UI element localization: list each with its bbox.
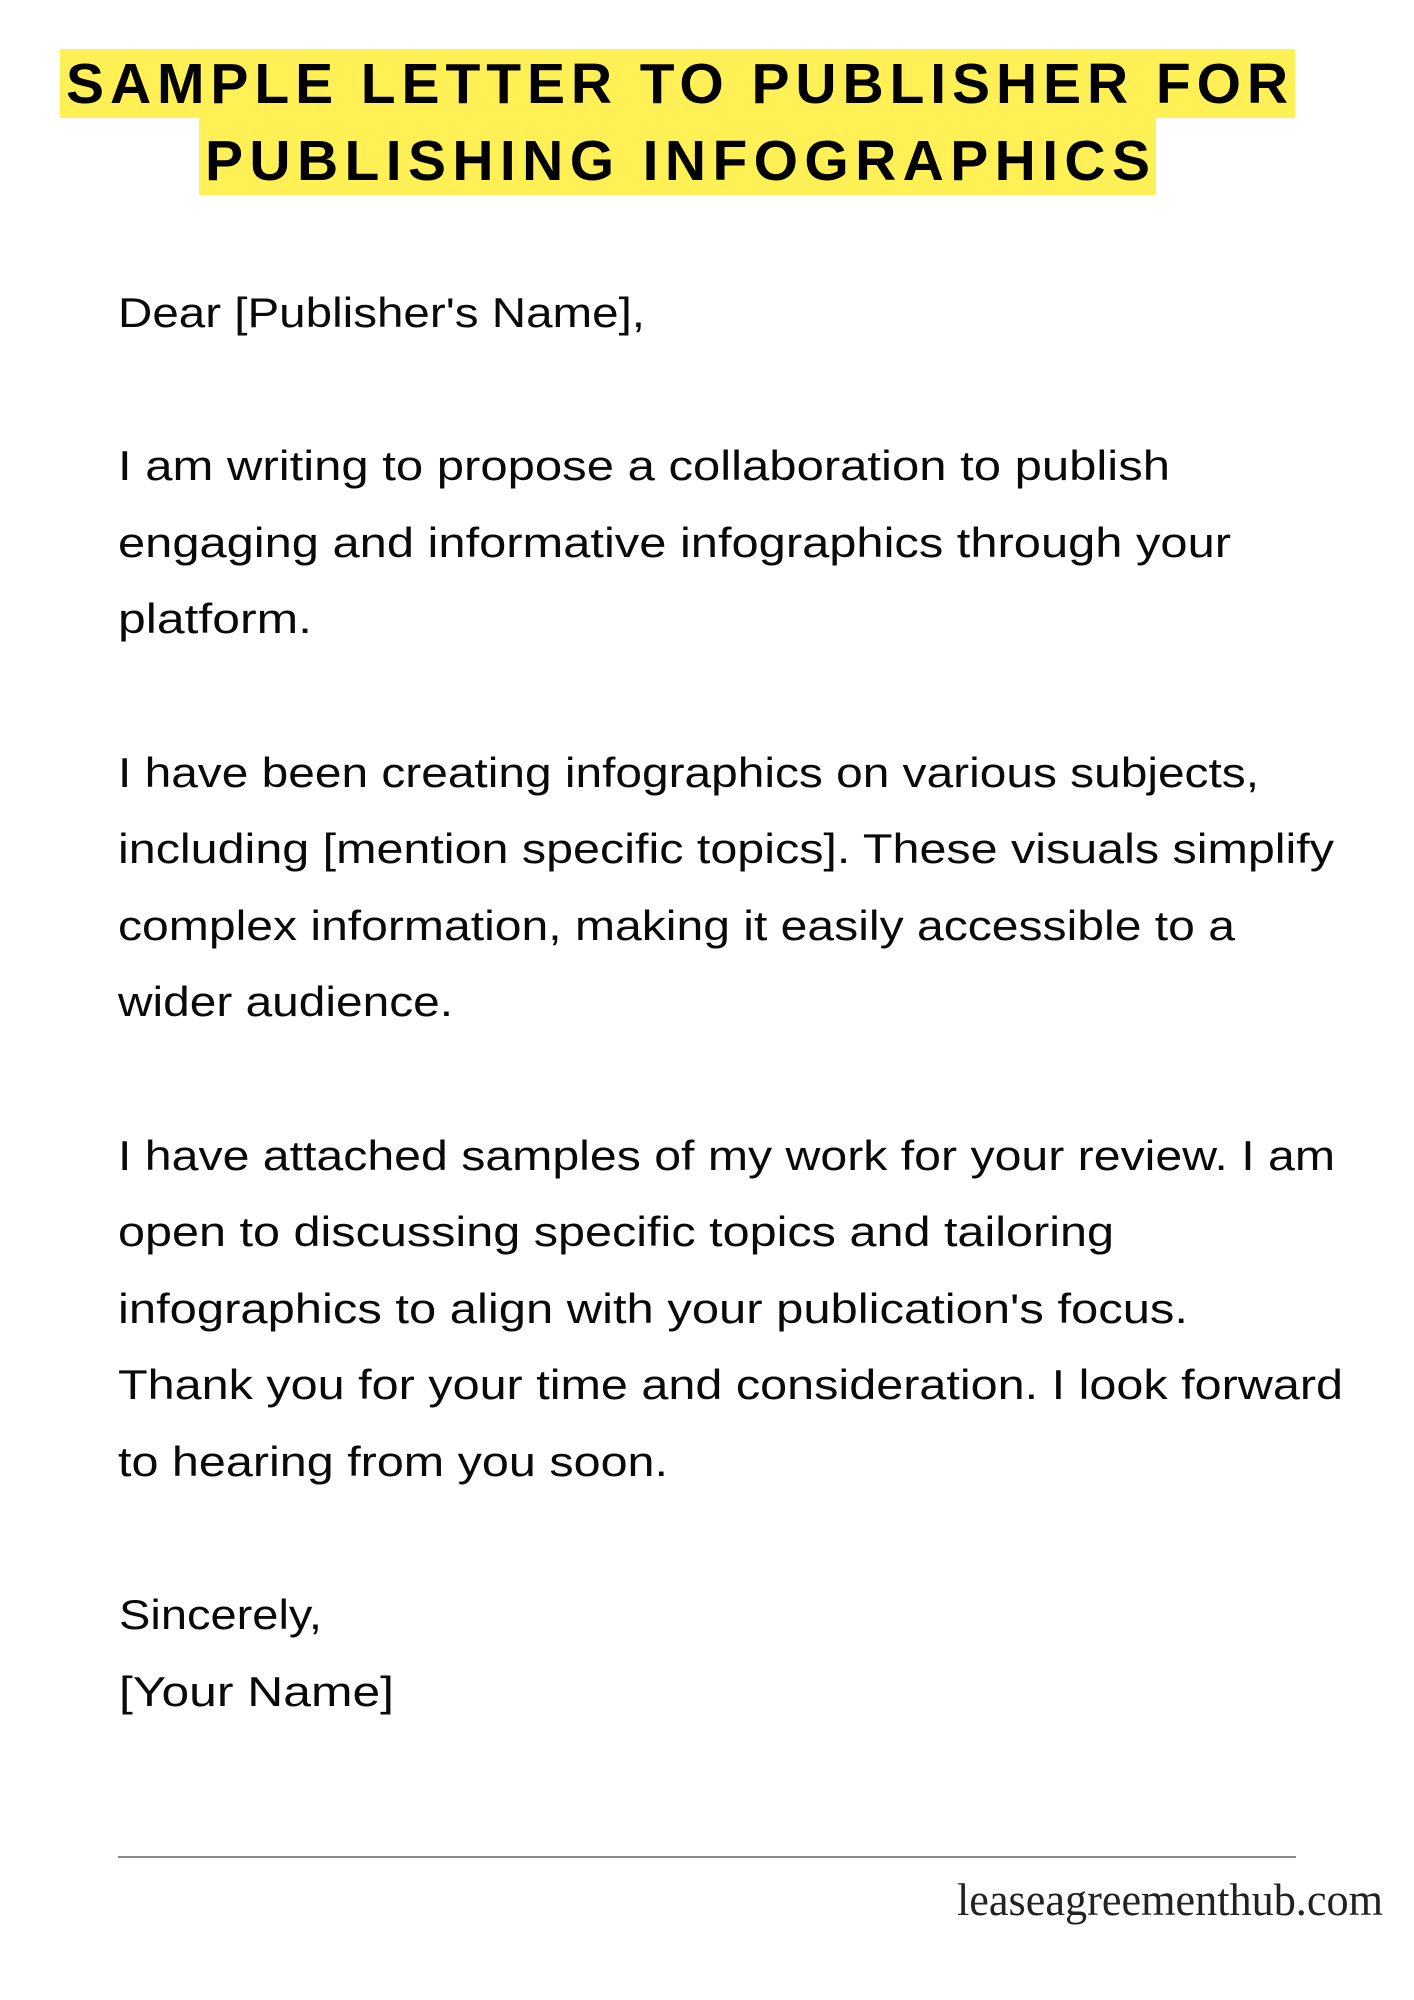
paragraph: proposal bbox=[118, 442, 1231, 642]
paragraph: experience: I have been creating infographics on various subjects, bbox=[118, 749, 1259, 796]
paragraph: samples and thanks: Thank you for your time and consideration. I look forward bbox=[118, 1361, 1343, 1408]
salutation: Dear [Publisher's Name], bbox=[118, 289, 645, 336]
footer website: leaseagreementhub.com bbox=[957, 1874, 1383, 1925]
title bbox=[60, 49, 1295, 195]
paragraph: proposal: engaging and informative infographics through your bbox=[118, 519, 1231, 566]
sign-off: [Your Name] bbox=[119, 1668, 394, 1715]
paragraph: samples and thanks: to hearing from you soon. bbox=[118, 1438, 668, 1485]
paragraph: experience: complex information, making it easily accessible to a bbox=[118, 902, 1236, 949]
paragraph: samples and thanks: open to discussing specific topics and tailoring bbox=[118, 1208, 1114, 1255]
paragraph: samples and thanks: I have attached samples of my work for your review. I am bbox=[118, 1132, 1335, 1179]
paragraph: experience: wider audience. bbox=[117, 978, 453, 1025]
title: SAMPLE LETTER TO PUBLISHER FOR bbox=[66, 52, 1288, 116]
paragraph: experience bbox=[117, 749, 1334, 1025]
paragraph: proposal: platform. bbox=[118, 595, 312, 642]
sign-off bbox=[119, 1591, 394, 1715]
paragraph: samples and thanks bbox=[118, 1132, 1343, 1485]
sign-off: Sincerely, bbox=[119, 1591, 322, 1638]
paragraph: experience: including [mention specific topics]. These visuals simplify bbox=[118, 825, 1334, 872]
paragraph: samples and thanks: infographics to align with your publication's focus. bbox=[118, 1285, 1188, 1332]
letter body bbox=[117, 289, 1343, 1715]
paragraph: proposal: I am writing to propose a collaboration to publish bbox=[118, 442, 1170, 489]
title: PUBLISHING INFOGRAPHICS bbox=[205, 129, 1150, 193]
